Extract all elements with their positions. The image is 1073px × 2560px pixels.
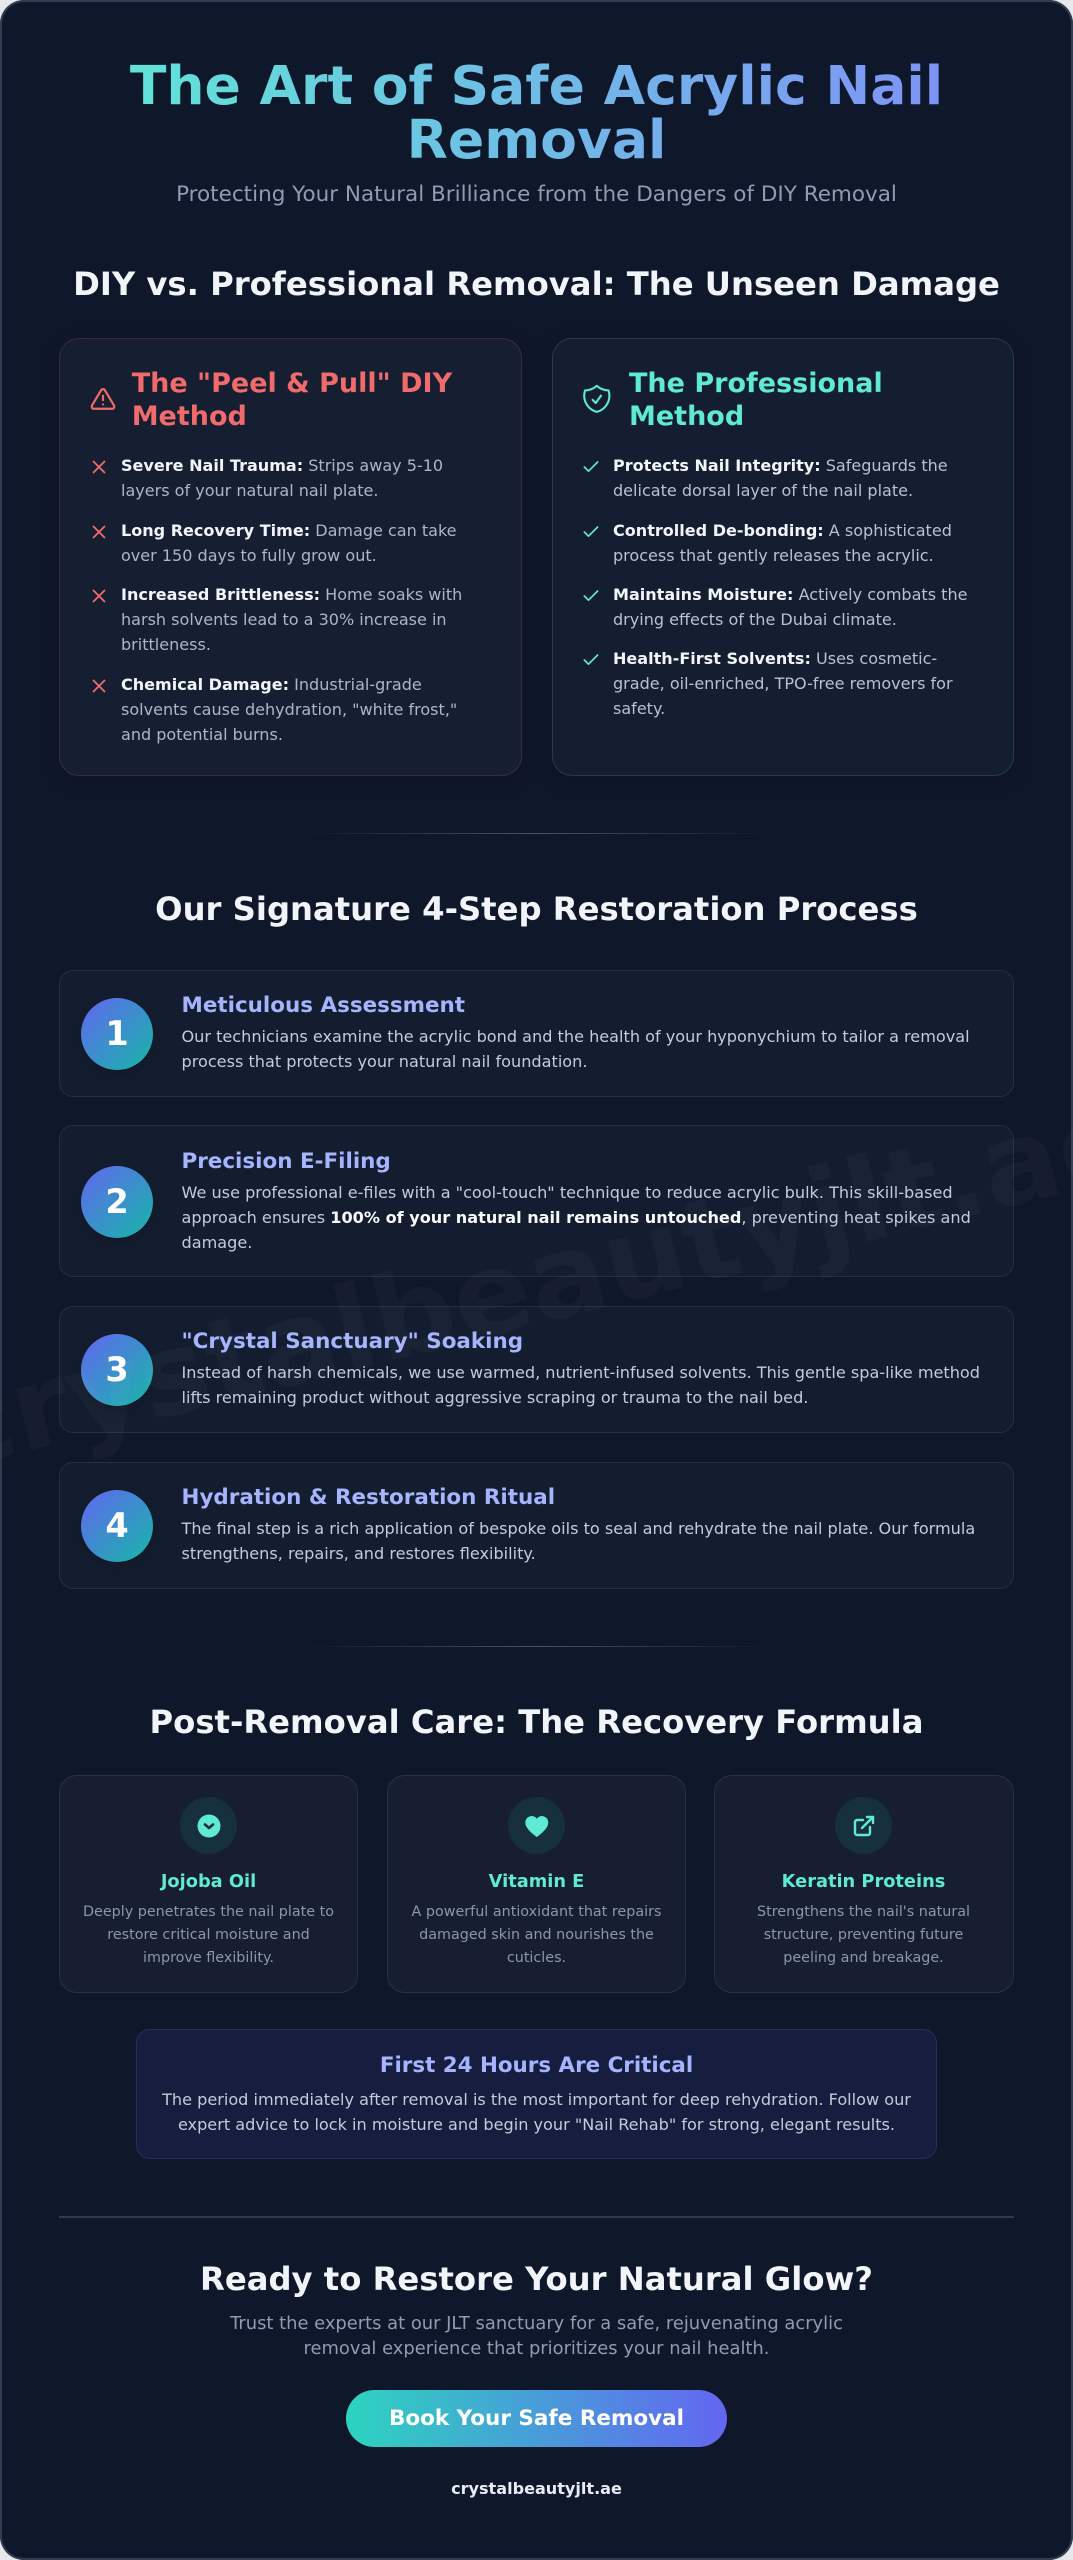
vitamin e title: Vitamin E: [489, 1871, 584, 1892]
list item: health-first solvents: safety.: [613, 699, 665, 718]
list item: severe nail trauma: [121, 456, 443, 500]
list item: health-first solvents: Health-First Solvents: Uses cosmetic-: [613, 649, 937, 668]
panel heading: professional: The Professional: [629, 368, 883, 398]
keratin description: peeling and breakage.: [783, 1950, 944, 1966]
panel heading: professional: [629, 368, 883, 432]
panel: keratin proteins: [714, 1775, 1014, 1993]
callout text: The period immediately after removal is the most important for deep rehydration. Follow our: [162, 2090, 911, 2109]
list item: increased brittleness: Increased Brittleness: Home soaks with: [121, 585, 462, 604]
list item: controlled de-bonding: [613, 521, 952, 565]
icon: check: [584, 461, 598, 472]
step 3 description: Instead of harsh chemicals, we use warmed, nutrient-infused solvents. This gentle spa-like method: [182, 1363, 980, 1382]
list item: increased brittleness: [121, 585, 462, 654]
panel: vitamin e: [387, 1775, 686, 1993]
list item: maintains moisture: Maintains Moisture: Actively combats the: [613, 585, 967, 604]
step number 3: [81, 1334, 153, 1406]
keratin description: [757, 1904, 970, 1966]
list item: chemical damage: solvents cause dehydration, "white frost,": [121, 700, 457, 719]
panel heading: professional: Method: [629, 400, 744, 432]
step 1 title: Meticulous Assessment: [182, 993, 465, 1018]
icon: cross: [92, 460, 106, 474]
heading: call to action: Ready to Restore Your Natural Glow?: [200, 2260, 873, 2298]
list item: chemical damage: Chemical Damage: Industrial-grade: [121, 675, 422, 694]
list item: protects nail integrity: delicate dorsal layer of the nail plate.: [613, 481, 913, 500]
footer url: crystalbeautyjlt.ae: [451, 2478, 622, 2498]
step 1 description: [182, 1027, 970, 1071]
jojoba description: restore critical moisture and: [107, 1927, 310, 1943]
list item: chemical damage: and potential burns.: [121, 725, 283, 744]
step 2: [59, 1125, 1014, 1277]
list item: increased brittleness: harsh solvents lead to a 30% increase in: [121, 610, 447, 629]
jojoba title: Jojoba Oil: [161, 1871, 256, 1892]
icon: shield check: [583, 384, 610, 413]
button: book your safe removal: [346, 2390, 727, 2447]
title: Removal: [407, 108, 666, 171]
list item: health-first solvents: grade, oil-enriched, TPO-free removers for: [613, 674, 953, 693]
step 2 description: damage.: [182, 1233, 252, 1252]
step 1: [59, 970, 1014, 1097]
icon: cross: [92, 680, 106, 692]
step number 2: [81, 1166, 153, 1238]
step 4 title: Hydration & Restoration Ritual: [182, 1485, 555, 1510]
list item: increased brittleness: brittleness.: [121, 635, 211, 654]
keratin description: Strengthens the nail's natural: [757, 1904, 970, 1920]
heading: restoration process: Our Signature 4-Step Restoration Process: [155, 890, 918, 928]
step number 1: [81, 998, 153, 1070]
icon: cross: [92, 590, 106, 602]
list item: severe nail trauma: Severe Nail Trauma: Strips away 5-10: [121, 456, 443, 475]
step 1 description: Our technicians examine the acrylic bond and the health of your hyponychium to tailor a removal: [182, 1027, 970, 1046]
list item: protects nail integrity: Protects Nail Integrity: Safeguards the: [613, 456, 948, 475]
list item: long recovery time: over 150 days to fully grow out.: [121, 546, 377, 565]
step 4: [59, 1462, 1014, 1589]
heading: recovery formula: Post-Removal Care: The Recovery Formula: [150, 1702, 923, 1740]
jojoba description: Deeply penetrates the nail plate to: [83, 1904, 334, 1920]
list item: maintains moisture: [613, 585, 967, 629]
keratin title: Keratin Proteins: [782, 1871, 945, 1892]
icon: chevron circle: [180, 1797, 237, 1854]
list item: controlled de-bonding: Controlled De-bonding: A sophisticated: [613, 521, 952, 540]
title: The Art of Safe Acrylic Nail: [130, 54, 943, 117]
list item: long recovery time: Long Recovery Time: Damage can take: [121, 521, 457, 540]
step 2 description: approach ensures 100% of your natural nail remains untouched, preventing heat spikes and: [182, 1208, 971, 1227]
list item: controlled de-bonding: process that gently releases the acrylic.: [613, 546, 934, 565]
step number 4: 4: [105, 1506, 129, 1544]
icon: heart: [508, 1797, 565, 1854]
panel heading: DIY: Method: [132, 400, 247, 432]
step 3: [59, 1306, 1014, 1433]
title: [59, 59, 1014, 166]
step number 3: 3: [105, 1350, 129, 1388]
icon: check: [584, 654, 598, 665]
call to action text: [230, 2313, 843, 2359]
step number 2: 2: [105, 1182, 129, 1220]
step 3 title: "Crystal Sanctuary" Soaking: [182, 1329, 523, 1354]
icon: external link: [835, 1797, 892, 1854]
button: book your safe removal: Book Your Safe Removal: [389, 2406, 684, 2431]
icon: check: [584, 590, 598, 601]
callout title: First 24 Hours Are Critical: [380, 2053, 693, 2078]
list item: health-first solvents: [613, 649, 953, 718]
panel heading: DIY: The "Peel & Pull" DIY: [132, 368, 452, 398]
step 3 description: lifts remaining product without aggressive scraping or trauma to the nail bed.: [182, 1388, 808, 1407]
step 2 description: We use professional e-files with a "cool-touch" technique to reduce acrylic bulk. This skill-based: [182, 1183, 953, 1202]
vitamin e description: [412, 1904, 661, 1966]
vitamin e description: damaged skin and nourishes the: [419, 1927, 654, 1943]
list item: protects nail integrity: [613, 456, 948, 500]
vitamin e description: A powerful antioxidant that repairs: [412, 1904, 661, 1920]
panel: DIY method: [59, 338, 522, 776]
call to action text: removal experience that prioritizes your nail health.: [304, 2338, 769, 2359]
list item: long recovery time: [121, 521, 457, 565]
panel: jojoba oil: [59, 1775, 358, 1993]
panel: professional method: [552, 338, 1014, 776]
panel heading: DIY: [132, 368, 452, 432]
callout text: [162, 2090, 911, 2134]
list item: chemical damage: [121, 675, 457, 744]
step number 1: 1: [105, 1014, 129, 1052]
call to action text: Trust the experts at our JLT sanctuary for a safe, rejuvenating acrylic: [230, 2313, 843, 2334]
keratin description: structure, preventing future: [764, 1927, 963, 1943]
jojoba description: improve flexibility.: [143, 1950, 274, 1966]
step 2 title: Precision E-Filing: [182, 1149, 391, 1174]
heading: DIY vs professional: DIY vs. Professional Removal: The Unseen Damage: [73, 264, 1000, 302]
step 1 description: process that protects your natural nail foundation.: [182, 1052, 587, 1071]
icon: check: [584, 526, 598, 537]
callout: first 24 hours: [136, 2029, 937, 2159]
step 3 description: [182, 1363, 980, 1407]
step 4 description: strengthens, repairs, and restores flexibility.: [182, 1544, 536, 1563]
callout text: expert advice to lock in moisture and begin your "Nail Rehab" for strong, elegant results.: [178, 2115, 895, 2134]
list item: severe nail trauma: layers of your natural nail plate.: [121, 481, 378, 500]
step 4 description: [181, 1519, 975, 1563]
step 4 description: The final step is a rich application of bespoke oils to seal and rehydrate the nail plate. Our formula: [182, 1519, 975, 1538]
vitamin e description: cuticles.: [507, 1950, 566, 1966]
step number 4: [81, 1490, 153, 1562]
icon: warning triangle: [90, 388, 116, 410]
jojoba description: [83, 1904, 334, 1966]
subtitle: Protecting Your Natural Brilliance from the Dangers of DIY Removal: [176, 182, 897, 207]
list item: maintains moisture: drying effects of the Dubai climate.: [613, 610, 897, 629]
icon: cross: [92, 526, 106, 538]
step 2 description: [182, 1183, 971, 1252]
